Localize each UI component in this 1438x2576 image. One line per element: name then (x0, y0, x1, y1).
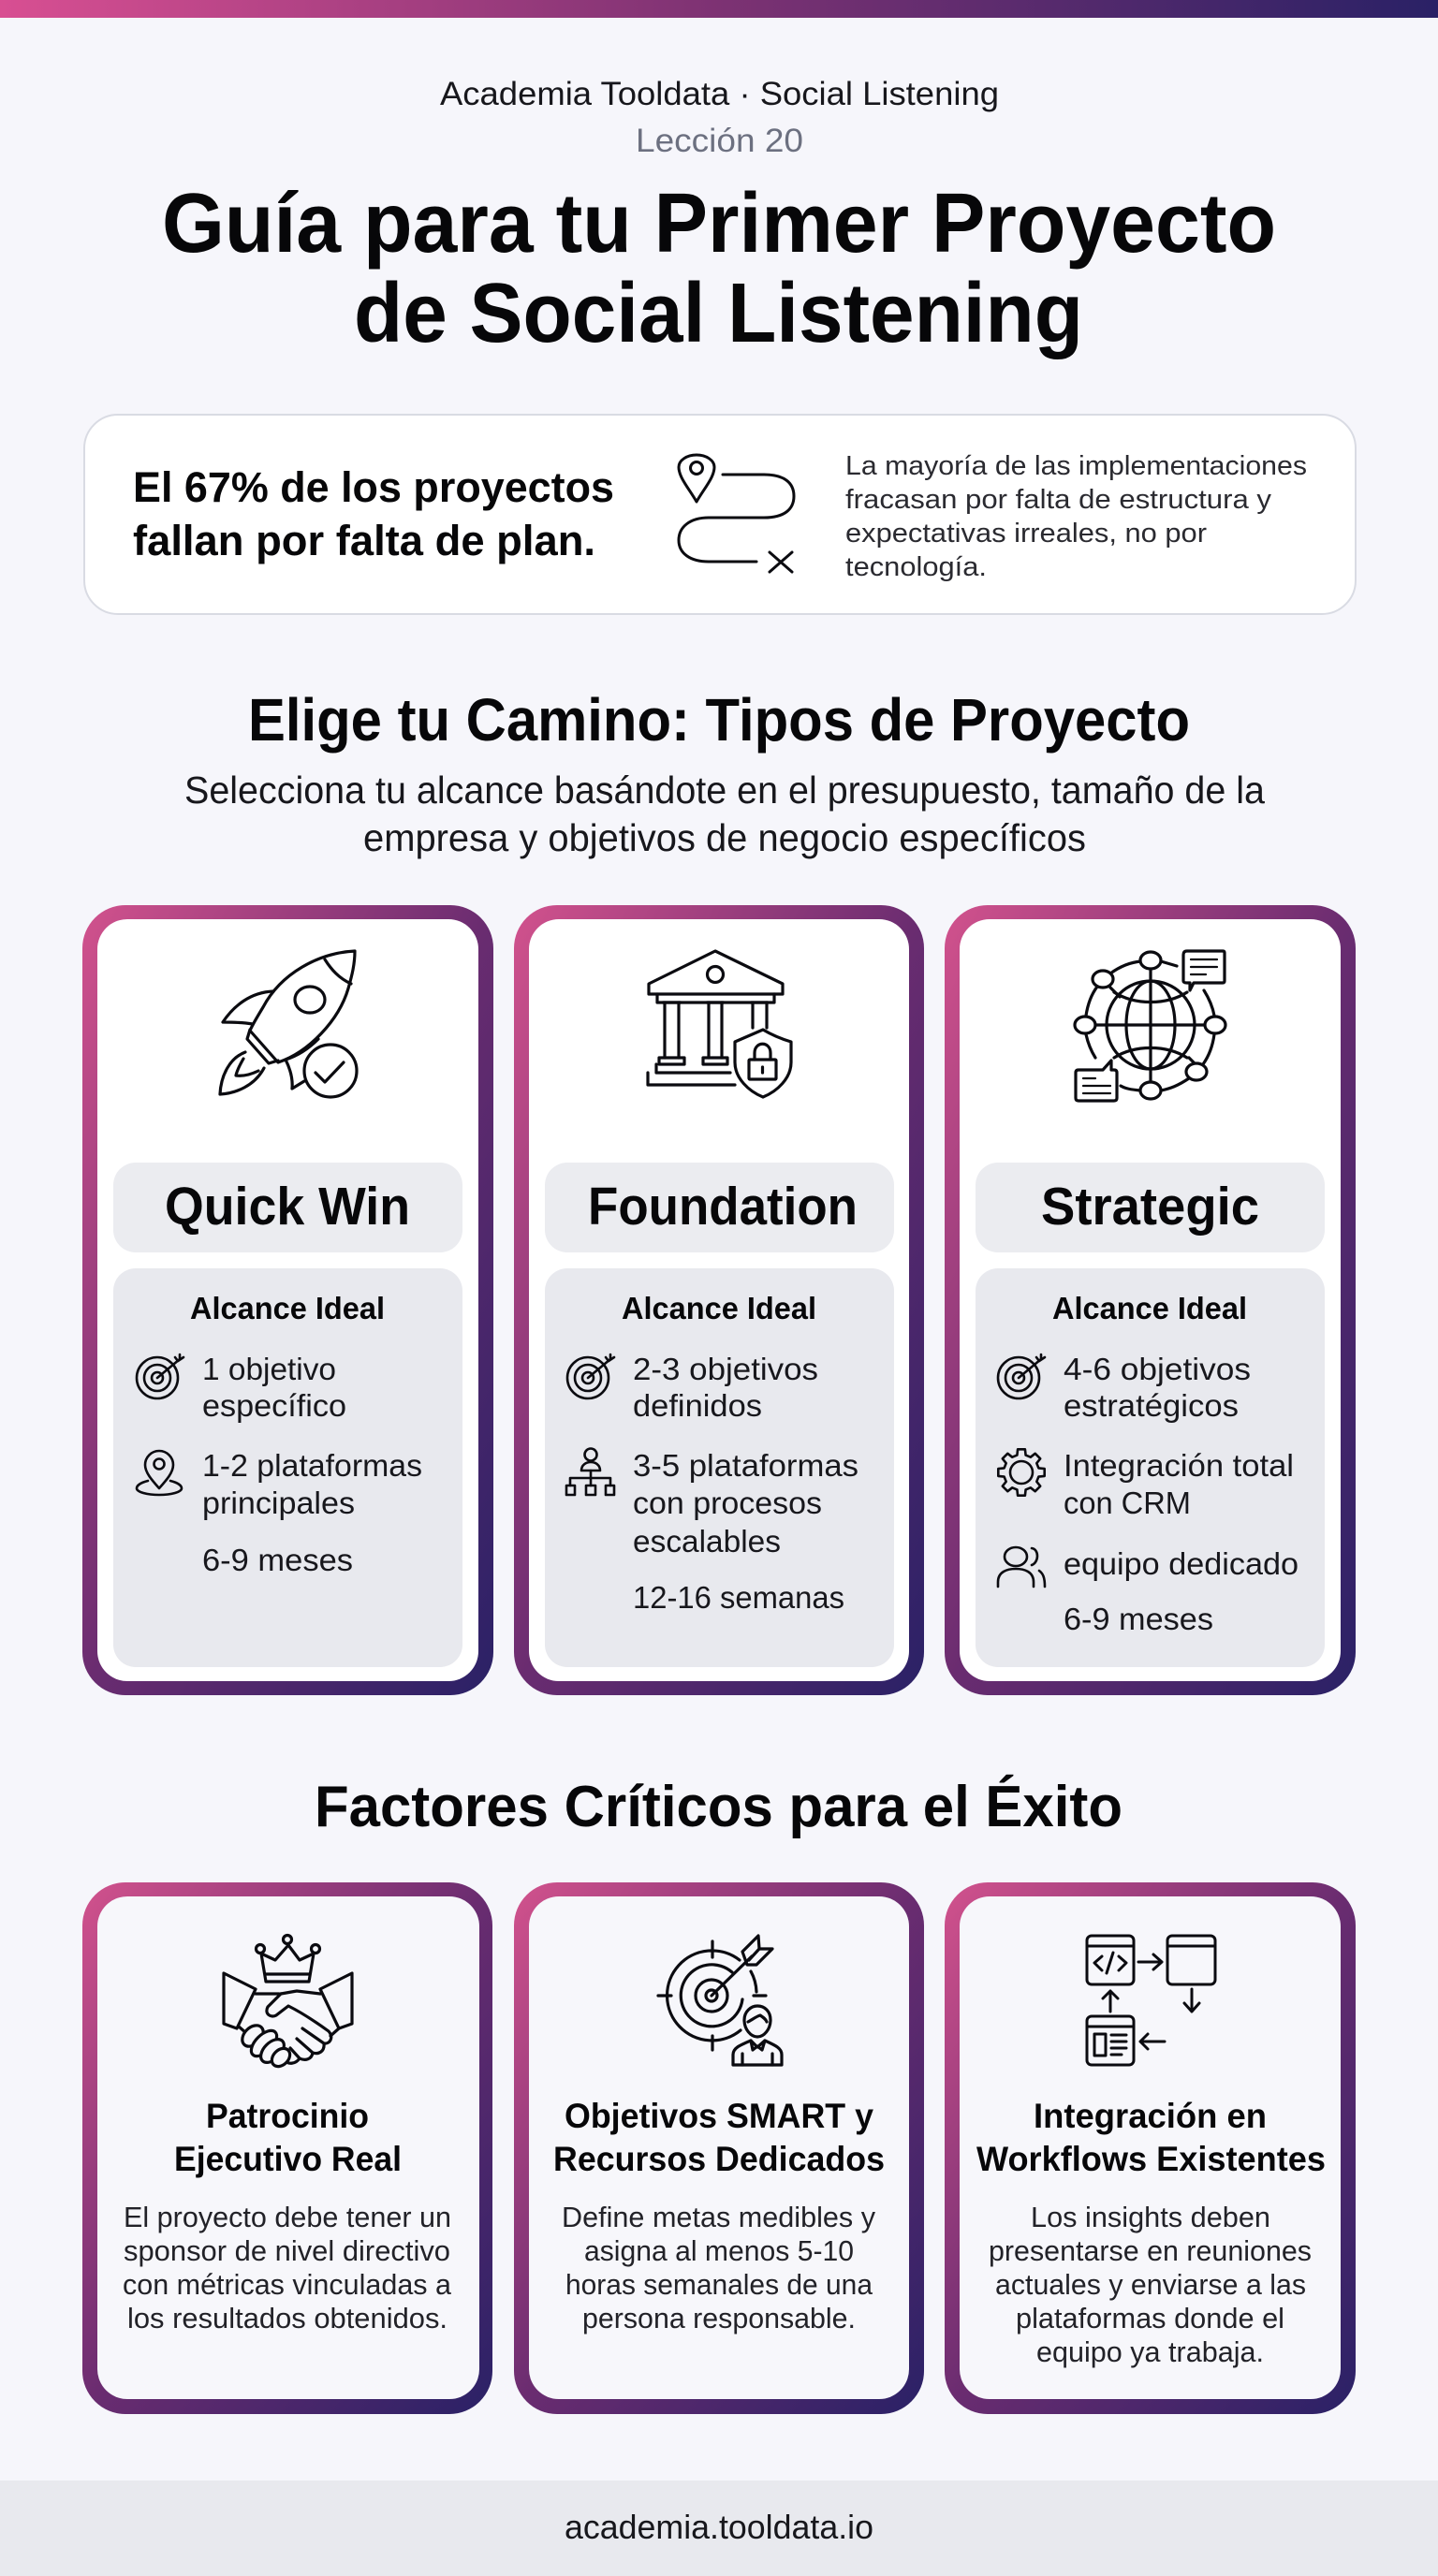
lesson number: Lección 20 (636, 123, 803, 159)
integration text: con CRM (1064, 1486, 1191, 1520)
panel: key statistic callout (84, 415, 1356, 614)
section intro text: Selecciona tu alcance basándote en el presupuesto, tamaño de la (184, 768, 1265, 812)
header (162, 76, 1276, 360)
factor title (976, 2097, 1326, 2178)
icon: target (998, 1354, 1045, 1398)
supporting text: fracasan por falta de estructura y (845, 485, 1272, 515)
platforms text: con procesos (633, 1486, 822, 1520)
eyebrow: academy name: Academia Tooldata · Social Listening (440, 76, 999, 112)
factor description: actuales y enviarse a las (995, 2268, 1306, 2301)
duration text: 12-16 semanas (633, 1580, 844, 1615)
footer: academia.tooldata.io (565, 2508, 873, 2546)
supporting text: La mayoría de las implementaciones (845, 451, 1307, 481)
card title (545, 1163, 894, 1252)
supporting text: tecnología. (845, 552, 987, 582)
objective text: 1 objetivo (202, 1352, 336, 1386)
factor description: sponsor de nivel directivo (124, 2234, 450, 2267)
objective text (202, 1352, 346, 1423)
icon: route from pin to X (679, 455, 794, 572)
factor description: presentarse en reuniones (989, 2234, 1312, 2267)
objective text: 4-6 objetivos (1064, 1352, 1251, 1386)
section heading: critical factors: Factores Críticos para el Éxito (315, 1775, 1123, 1839)
scope heading: Alcance Ideal (190, 1291, 385, 1325)
objective text: específico (202, 1388, 346, 1423)
section intro text: empresa y objetivos de negocio específicos (363, 816, 1086, 859)
top gradient bar (0, 0, 1438, 18)
factor description: asigna al menos 5-10 (584, 2234, 854, 2267)
card title: Strategic (1041, 1177, 1259, 1237)
duration text: 6-9 meses (1064, 1602, 1213, 1636)
supporting text (845, 451, 1307, 582)
icon: target, arrow and person (658, 1936, 782, 2065)
factor title: Ejecutivo Real (174, 2140, 402, 2178)
icon: gear (998, 1449, 1045, 1496)
icon: hierarchy (566, 1449, 614, 1495)
icon: crown and handshake (224, 1936, 352, 2070)
factor description: Los insights deben (1031, 2201, 1270, 2233)
objective text: estratégicos (1064, 1388, 1239, 1423)
objective text (1064, 1352, 1251, 1423)
panel: Quick Win (82, 905, 493, 1695)
factor title (553, 2097, 885, 2178)
icon: rocket with check (220, 951, 357, 1097)
factor title: Recursos Dedicados (553, 2140, 885, 2178)
duration text: 6-9 meses (202, 1543, 353, 1577)
title (162, 177, 1276, 360)
factor title (174, 2097, 402, 2178)
icon: people (998, 1547, 1045, 1587)
icon: target (137, 1354, 183, 1398)
factor description: equipo ya trabaja. (1036, 2335, 1264, 2368)
team text: equipo dedicado (1064, 1546, 1299, 1581)
platforms text: 3-5 plataformas (633, 1448, 858, 1483)
scope box (976, 1268, 1325, 1667)
factor description: los resultados obtenidos. (127, 2302, 448, 2334)
factor description: con métricas vinculadas a (123, 2268, 452, 2301)
icon: globe network (1075, 951, 1225, 1101)
scope heading: Alcance Ideal (1052, 1291, 1247, 1325)
panel: SMART objectives (514, 1882, 924, 2414)
factor title: Integración en (1034, 2097, 1267, 2135)
title: Guía para tu Primer Proyecto (162, 177, 1276, 271)
platforms text: principales (202, 1486, 355, 1520)
section intro text (184, 768, 1265, 859)
scope box (113, 1268, 462, 1667)
objective text: 2-3 objetivos (633, 1352, 818, 1386)
factor title: Objetivos SMART y (565, 2097, 873, 2135)
factor description: plataformas donde el (1016, 2302, 1284, 2334)
card title (976, 1163, 1325, 1252)
card title: Quick Win (165, 1177, 410, 1237)
icon: target (567, 1354, 614, 1398)
panel: Foundation (514, 905, 924, 1695)
icon: windows connected by arrows (1087, 1936, 1215, 2065)
factor description (562, 2201, 875, 2334)
objective text (633, 1352, 818, 1423)
platforms text: 1-2 plataformas (202, 1448, 422, 1483)
supporting text: expectativas irreales, no por (845, 519, 1207, 549)
factor description: persona responsable. (582, 2302, 856, 2334)
factor title: Workflows Existentes (976, 2140, 1326, 2178)
section heading: project types: Elige tu Camino: Tipos de Proyecto (248, 686, 1190, 754)
card title (113, 1163, 462, 1252)
icon: map pin (137, 1451, 182, 1495)
platforms text (633, 1448, 858, 1559)
integration text (1064, 1448, 1294, 1520)
panel: Strategic (945, 905, 1356, 1695)
statistic headline: El 67% de los proyectos (133, 463, 614, 511)
statistic headline: fallan por falta de plan. (133, 517, 595, 564)
icon: temple with shield (648, 951, 791, 1097)
platforms text (202, 1448, 422, 1520)
factor title: Patrocinio (206, 2097, 369, 2135)
factor description (989, 2201, 1312, 2368)
panel: workflow integration (945, 1882, 1356, 2414)
platforms text: escalables (633, 1524, 781, 1559)
factor description (123, 2201, 452, 2334)
panel: executive sponsor (82, 1882, 492, 2414)
integration text: Integración total (1064, 1448, 1294, 1483)
title: de Social Listening (354, 267, 1083, 360)
footer (0, 2481, 1438, 2576)
scope heading: Alcance Ideal (622, 1291, 816, 1325)
scope box (545, 1268, 894, 1667)
factor description: horas semanales de una (565, 2268, 873, 2301)
factor description: Define metas medibles y (562, 2201, 875, 2233)
factor description: El proyecto debe tener un (124, 2201, 451, 2233)
statistic headline (133, 463, 614, 564)
objective text: definidos (633, 1388, 762, 1423)
card title: Foundation (588, 1177, 858, 1237)
